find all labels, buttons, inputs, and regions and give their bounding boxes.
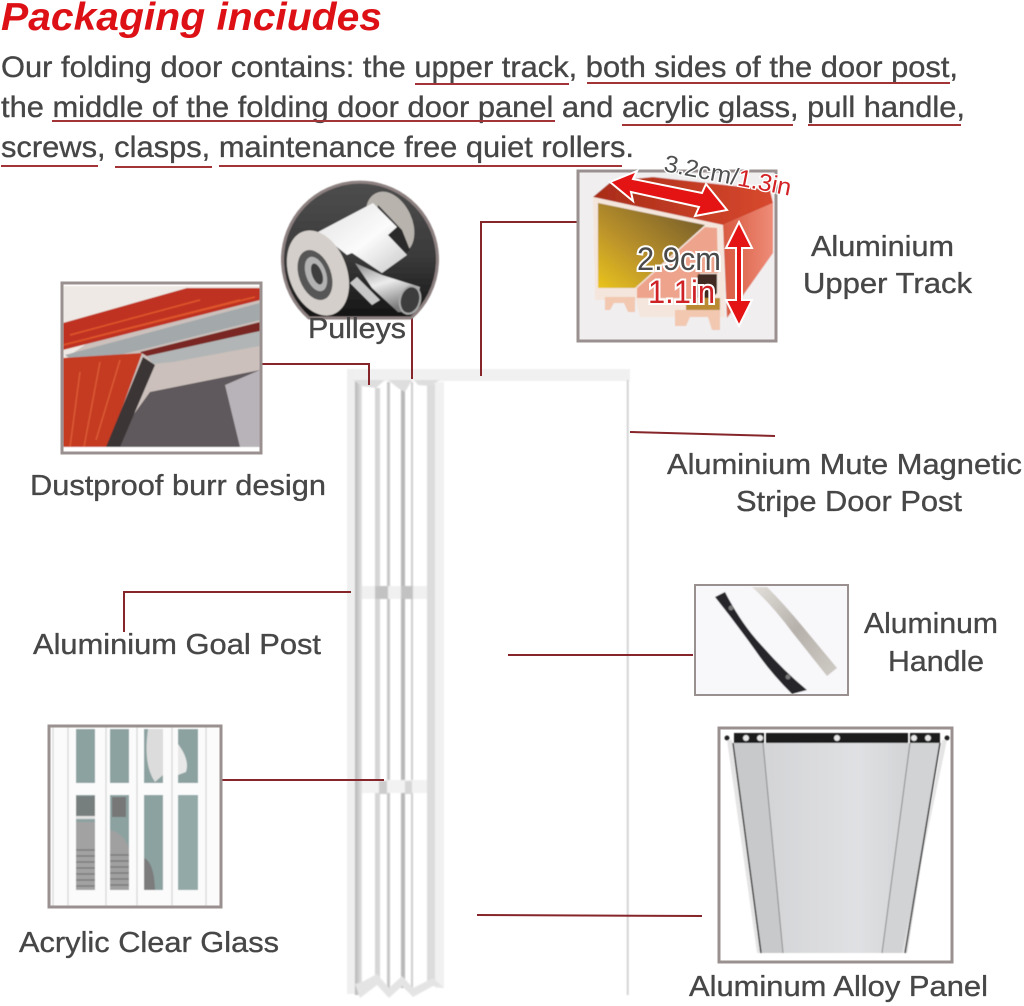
rear wheel — [356, 184, 424, 262]
label: door post: Stripe Door Post — [736, 486, 962, 518]
width arrow — [610, 171, 727, 216]
label: handle — [864, 608, 998, 678]
label: upper track — [803, 231, 973, 300]
image: dustproof burr — [62, 283, 261, 453]
image: upper track — [578, 171, 776, 341]
track dimensions — [637, 150, 794, 310]
label: dustproof: Dustproof burr design — [30, 470, 326, 502]
label: pulleys: Pulleys — [308, 313, 406, 345]
label: upper track: Upper Track — [803, 268, 973, 300]
lower arm — [350, 277, 380, 305]
label: acrylic: Acrylic Clear Glass — [19, 927, 279, 959]
image: aluminum alloy panel — [719, 728, 952, 962]
track side face — [723, 203, 773, 318]
intro paragraph: the middle of the folding door door panel and acrylic glass, pull handle, — [1, 91, 965, 124]
label: handle: Aluminum — [864, 608, 998, 640]
label: alloy panel: Aluminum Alloy Panel — [689, 971, 988, 1003]
leader lines — [124, 222, 775, 916]
folding door — [347, 369, 630, 998]
track dimensions: 3.2cm/1.3in — [662, 150, 794, 202]
bracket shadow — [372, 205, 410, 262]
track top face — [593, 177, 773, 225]
silver bracket — [318, 203, 407, 273]
label: handle: Handle — [888, 646, 984, 678]
intro paragraph: screws, clasps, maintenance free quiet rollers. — [1, 131, 634, 164]
front wheel — [276, 222, 360, 324]
intro paragraph — [1, 51, 965, 167]
intro paragraph: Our folding door contains: the upper track, both sides of the door post, — [1, 51, 958, 84]
label: goal post: Aluminium Goal Post — [33, 629, 321, 661]
label: upper track: Aluminium — [811, 231, 954, 263]
image: pulley — [276, 182, 438, 324]
axle cylinder — [355, 263, 420, 312]
track dimensions: 2.9cm — [637, 241, 721, 277]
image: aluminum handle — [695, 585, 848, 695]
image: acrylic clear glass — [49, 726, 221, 907]
door frame — [347, 369, 630, 995]
label: door post: Aluminium Mute Magnetic — [667, 449, 1022, 481]
label: door post — [667, 449, 1022, 518]
track profile — [593, 197, 725, 317]
height arrow — [726, 222, 752, 326]
folded door panels — [353, 380, 444, 998]
track dimensions: 1.1in — [648, 274, 715, 310]
